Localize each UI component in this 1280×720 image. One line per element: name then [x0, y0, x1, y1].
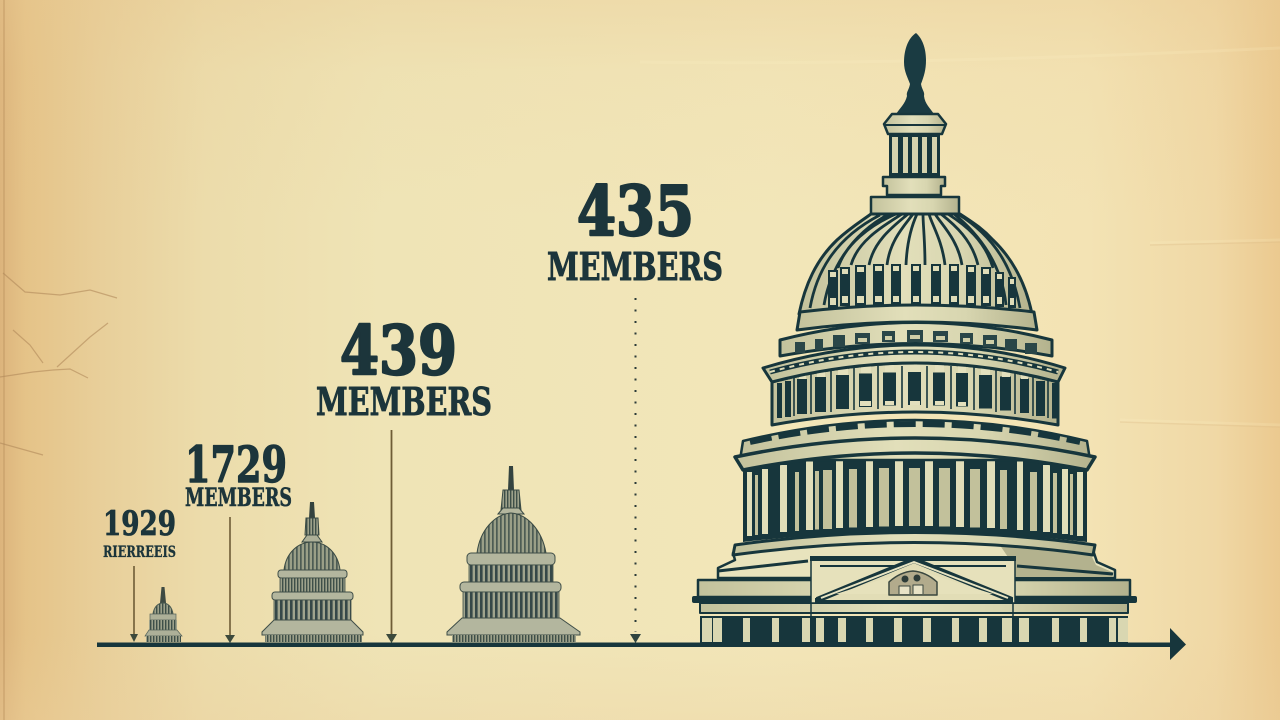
large capitol dome	[447, 466, 580, 642]
colonnade	[743, 453, 1087, 542]
dentilled cornice	[763, 345, 1065, 382]
label: 435 members: MEMBERS	[547, 244, 723, 289]
tiny capitol dome	[145, 587, 182, 642]
label: 439 members: 439	[340, 311, 457, 390]
ground floor wings	[692, 580, 1137, 643]
label: 1729 members	[185, 435, 292, 512]
ring under dome	[797, 305, 1037, 330]
pointer: 439	[386, 430, 397, 643]
pointer: 435 dotted	[630, 298, 641, 643]
attic row	[780, 322, 1052, 356]
label: 1729 members: MEMBERS	[185, 483, 292, 512]
drum with arched windows	[772, 363, 1058, 425]
band above columns	[735, 438, 1095, 470]
terrace step	[718, 535, 1115, 578]
pointer: 1929	[130, 566, 138, 642]
central portico	[810, 556, 1016, 643]
statue on top	[896, 33, 934, 114]
ribbed dome	[799, 214, 1032, 314]
pediment	[817, 560, 1012, 600]
band below columns	[733, 532, 1095, 555]
pointer: 1729	[225, 517, 235, 643]
label: 1929	[103, 504, 176, 561]
label: 435 members: 435	[577, 172, 694, 252]
pediment sculpture	[889, 571, 937, 595]
medium capitol dome	[262, 502, 363, 642]
timeline axis with arrow	[97, 628, 1186, 660]
balustrade tier	[740, 420, 1090, 460]
label: 1729 members: 1729	[185, 435, 287, 494]
lantern	[871, 114, 959, 214]
label: 1929: 1929	[103, 504, 176, 544]
label: 439 members: MEMBERS	[316, 379, 492, 424]
label: 435 members	[547, 172, 723, 289]
label: 1929: RIERREEIS	[103, 542, 176, 561]
label: 439 members	[316, 311, 492, 424]
main capitol building	[692, 33, 1137, 643]
